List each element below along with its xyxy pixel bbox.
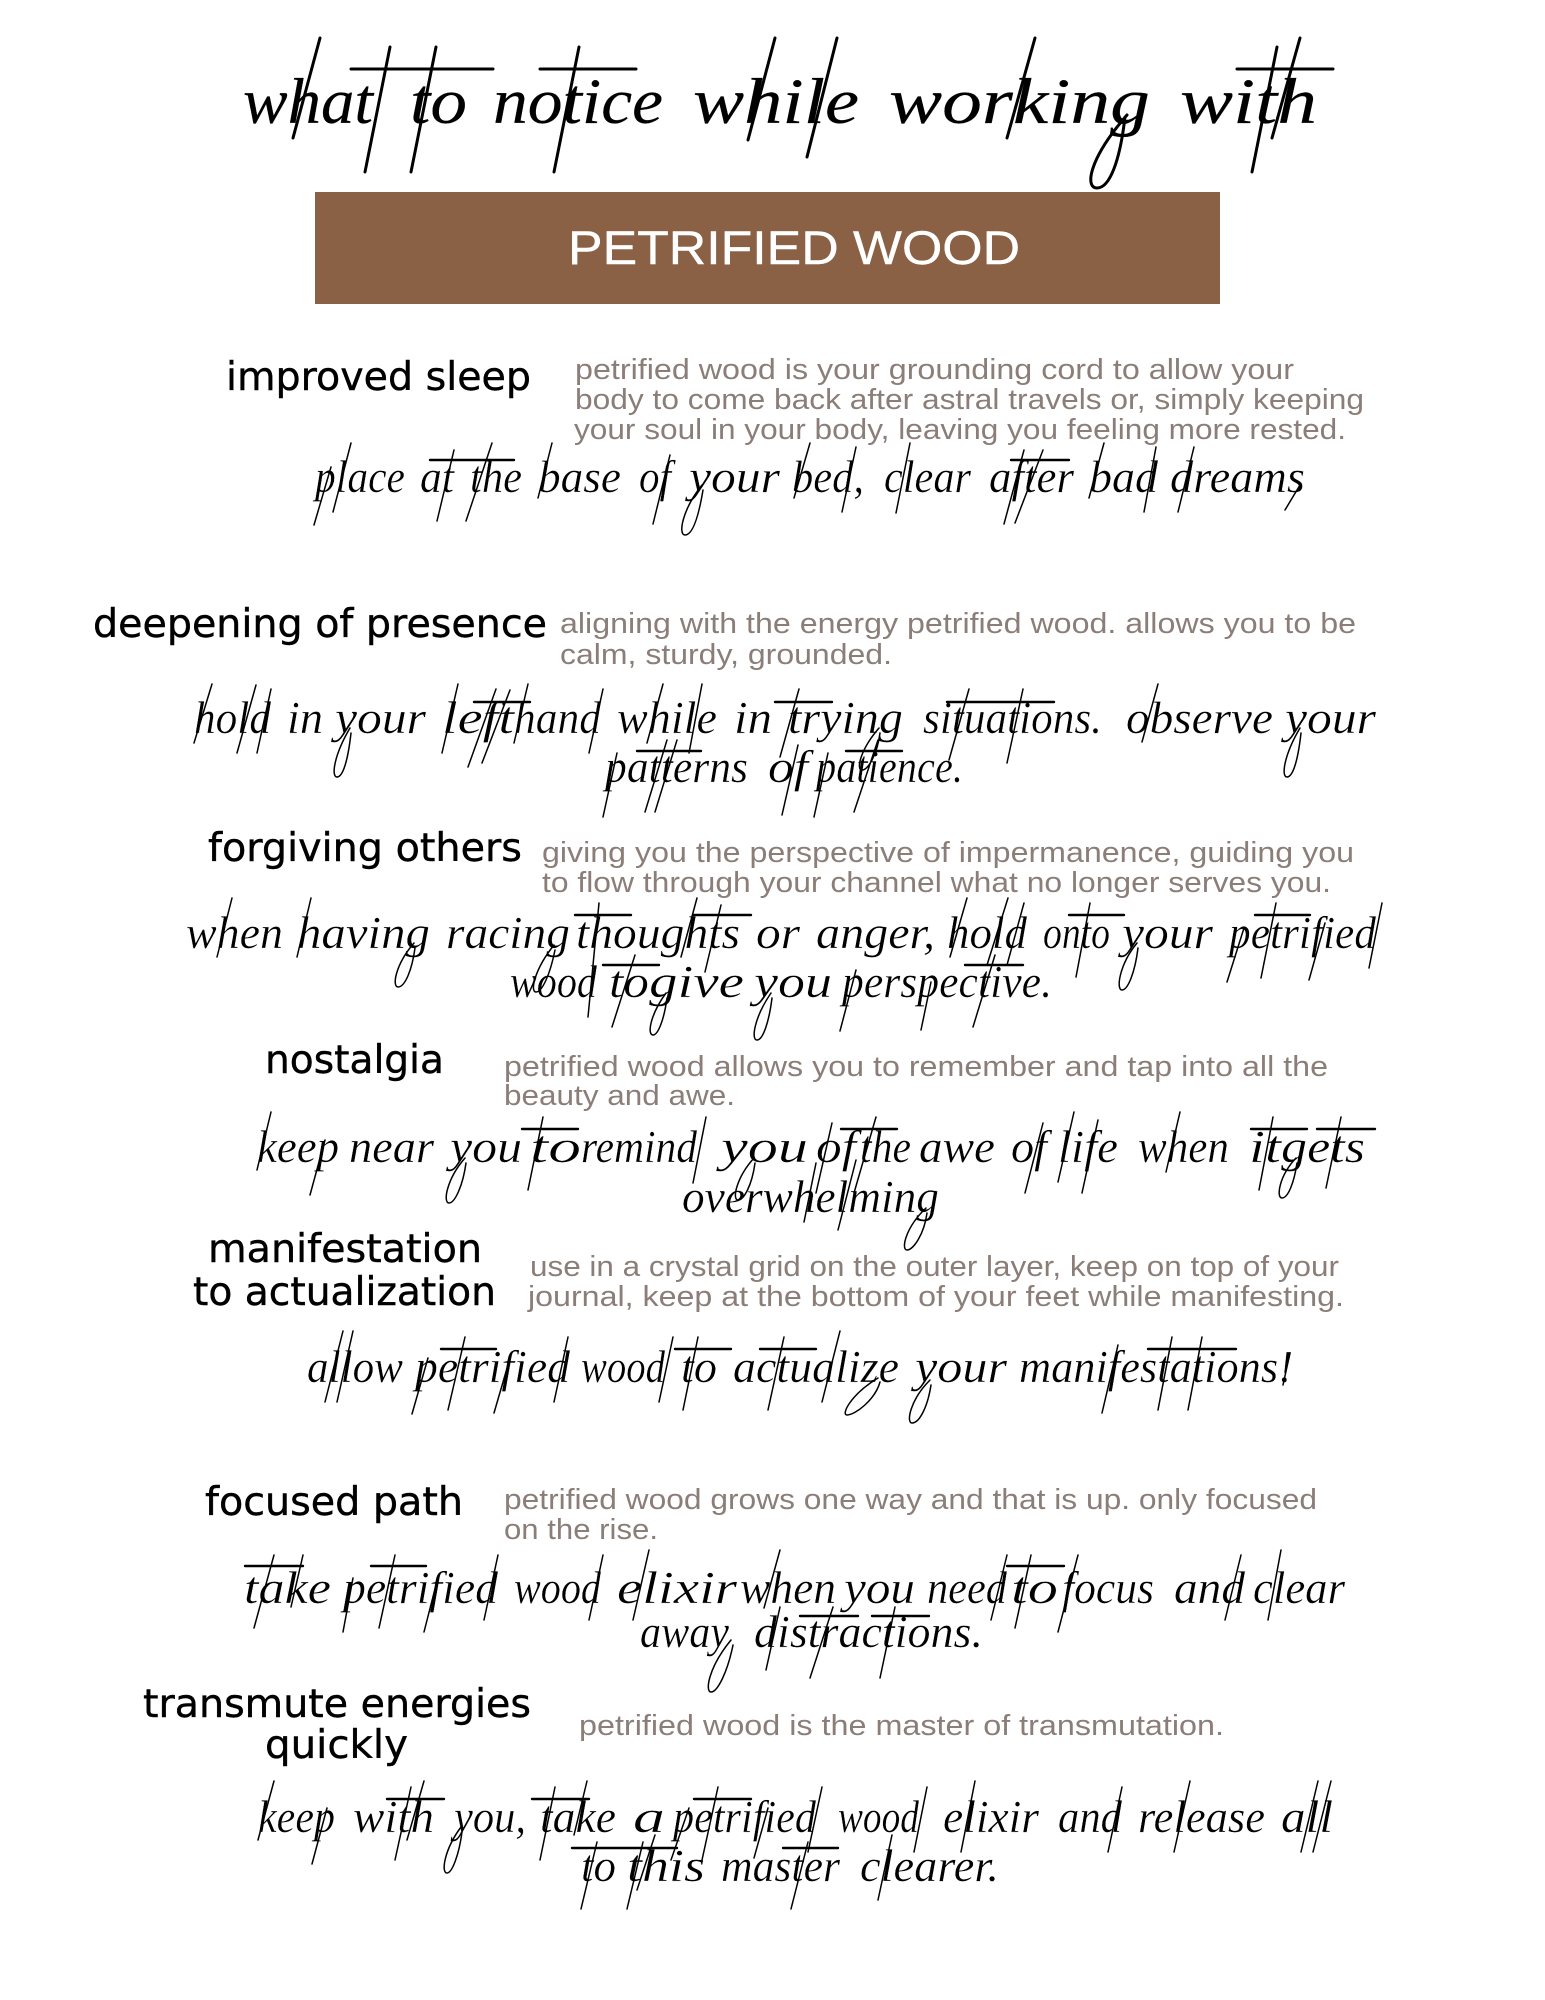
banner: petrified wood: PETRIFIED WOOD bbox=[568, 221, 1020, 274]
script note: deepening of presence: in bbox=[734, 692, 772, 743]
title: notice bbox=[493, 66, 663, 138]
script note: nostalgia: it bbox=[1249, 1121, 1283, 1172]
script note: manifestation to actualization: petrified bbox=[412, 1341, 571, 1392]
heading: transmute energies quickly: quickly bbox=[265, 1723, 408, 1768]
script note: transmute energies quickly: and bbox=[1058, 1791, 1123, 1842]
script note: improved sleep: clear bbox=[884, 451, 972, 502]
script note: nostalgia: the bbox=[860, 1121, 911, 1172]
heading: focused path: focused path bbox=[205, 1480, 463, 1525]
panel: transmute energies quickly bbox=[143, 1682, 1333, 1909]
script note: improved sleep: dreams bbox=[1170, 451, 1305, 502]
script note: deepening of presence: trying bbox=[788, 692, 903, 743]
title: to bbox=[410, 66, 467, 138]
script note: transmute energies quickly: to bbox=[581, 1840, 616, 1891]
script note: deepening of presence: your bbox=[1281, 692, 1377, 743]
script note: manifestation to actualization: allow bbox=[307, 1341, 403, 1392]
script note: forgiving others: hold bbox=[947, 907, 1028, 958]
script note: deepening of presence: patience. bbox=[813, 741, 963, 792]
script note: transmute energies quickly: all bbox=[1281, 1791, 1333, 1842]
description: forgiving others: to flow through your channel what no longer serves you. bbox=[542, 867, 1331, 899]
script note: forgiving others: you bbox=[749, 956, 832, 1007]
script note: deepening of presence: while bbox=[617, 692, 717, 743]
description: manifestation to actualization bbox=[527, 1251, 1344, 1313]
description: nostalgia: petrified wood allows you to remember and tap into all the bbox=[504, 1051, 1328, 1083]
script note: nostalgia bbox=[257, 1112, 1375, 1250]
description: focused path: petrified wood grows one way and that is up. only focused bbox=[504, 1484, 1317, 1516]
script note: transmute energies quickly: wood bbox=[838, 1791, 920, 1842]
description: focused path bbox=[504, 1484, 1317, 1546]
script note: focused path: clear bbox=[1253, 1562, 1346, 1613]
script note: nostalgia: keep bbox=[257, 1121, 339, 1172]
script note: transmute energies quickly: master bbox=[721, 1840, 841, 1891]
script note: nostalgia: of bbox=[816, 1121, 863, 1172]
script note: nostalgia: life bbox=[1058, 1121, 1118, 1172]
description: improved sleep bbox=[574, 354, 1364, 446]
script note: improved sleep: place bbox=[312, 451, 405, 502]
script note: forgiving others: or bbox=[756, 907, 801, 958]
description: focused path: on the rise. bbox=[504, 1514, 658, 1546]
title: what bbox=[243, 66, 375, 138]
script note: improved sleep: of bbox=[639, 451, 677, 502]
description: deepening of presence: calm, sturdy, grounded. bbox=[560, 639, 892, 671]
script note: deepening of presence: your bbox=[331, 692, 427, 743]
title: working bbox=[889, 66, 1150, 138]
script note: nostalgia: near bbox=[349, 1121, 435, 1172]
script note: nostalgia: of bbox=[1011, 1121, 1053, 1172]
script note: transmute energies quickly: this bbox=[627, 1840, 705, 1891]
script note: transmute energies quickly: petrified bbox=[670, 1791, 817, 1842]
description: manifestation to actualization: use in a crystal grid on the outer layer, keep on top of your bbox=[530, 1251, 1339, 1283]
panel: nostalgia bbox=[257, 1038, 1375, 1250]
script note: nostalgia: gets bbox=[1281, 1121, 1365, 1172]
script note: focused path: need bbox=[927, 1562, 1008, 1613]
description: forgiving others bbox=[542, 837, 1354, 899]
panel: deepening of presence bbox=[93, 602, 1377, 817]
script note: manifestation to actualization: to bbox=[681, 1341, 717, 1392]
script note: improved sleep: after bbox=[989, 451, 1075, 502]
heading: manifestation to actualization: to actualization bbox=[193, 1270, 496, 1315]
script note: transmute energies quickly: a bbox=[633, 1791, 665, 1842]
description: improved sleep: your soul in your body, leaving you feeling more rested. bbox=[574, 414, 1346, 446]
script note: nostalgia: to bbox=[530, 1121, 581, 1172]
script note: forgiving others: petrified bbox=[1226, 907, 1377, 958]
heading: forgiving others: forgiving others bbox=[208, 826, 522, 871]
script note: forgiving others: thoughts bbox=[576, 907, 740, 958]
description: deepening of presence bbox=[560, 608, 1356, 671]
description: nostalgia: beauty and awe. bbox=[504, 1080, 735, 1112]
script note: forgiving others: having bbox=[297, 907, 430, 958]
script note: nostalgia: when bbox=[1138, 1121, 1229, 1172]
script note: nostalgia: overwhelming bbox=[682, 1171, 939, 1222]
script note: focused path: wood bbox=[514, 1562, 602, 1613]
script note: manifestation to actualization: your bbox=[911, 1341, 1008, 1392]
script note: improved sleep bbox=[312, 443, 1305, 535]
script note: nostalgia: you bbox=[716, 1121, 808, 1172]
script note: focused path: when bbox=[740, 1562, 836, 1613]
script note: improved sleep: bed, bbox=[792, 451, 864, 502]
script note: improved sleep: your bbox=[685, 451, 781, 502]
script note: improved sleep: the bbox=[470, 451, 522, 502]
title: with bbox=[1180, 66, 1317, 138]
script note: forgiving others: when bbox=[186, 907, 283, 958]
script note: manifestation to actualization: wood bbox=[581, 1341, 666, 1392]
script note: manifestation to actualization: manifestations! bbox=[1019, 1341, 1293, 1392]
heading: transmute energies quickly: transmute energies bbox=[143, 1682, 531, 1727]
description: nostalgia bbox=[504, 1051, 1328, 1112]
script note: deepening of presence: in bbox=[287, 692, 323, 743]
script note: forgiving others: wood bbox=[510, 956, 598, 1007]
script note: deepening of presence: hold bbox=[194, 692, 272, 743]
script note: forgiving others: racing bbox=[446, 907, 570, 958]
description: manifestation to actualization: journal, keep at the bottom of your feet while manifesting. bbox=[527, 1281, 1344, 1313]
title: while bbox=[693, 66, 859, 138]
script note: deepening of presence: left bbox=[442, 692, 515, 743]
script note: improved sleep: at bbox=[420, 451, 455, 502]
script note: focused path: distractions. bbox=[754, 1606, 983, 1657]
panel: manifestation to actualization bbox=[193, 1227, 1344, 1423]
script note: manifestation to actualization: actualize bbox=[733, 1341, 899, 1392]
script note: improved sleep: bad bbox=[1089, 451, 1159, 502]
script note: transmute energies quickly: take bbox=[540, 1791, 616, 1842]
script note: forgiving others: perspective. bbox=[839, 956, 1052, 1007]
script note: transmute energies quickly: you, bbox=[450, 1791, 526, 1842]
script note: focused path: petrified bbox=[340, 1562, 499, 1613]
heading: manifestation to actualization bbox=[193, 1227, 496, 1315]
script note: focused path bbox=[244, 1550, 1346, 1692]
script note: transmute energies quickly: release bbox=[1138, 1791, 1265, 1842]
script note: nostalgia: awe bbox=[919, 1121, 995, 1172]
script note: manifestation to actualization bbox=[307, 1331, 1293, 1423]
script note: nostalgia: remind bbox=[581, 1121, 698, 1172]
script note: transmute energies quickly: elixir bbox=[943, 1791, 1040, 1842]
script note: transmute energies quickly bbox=[258, 1781, 1333, 1909]
title bbox=[243, 38, 1333, 188]
script note: deepening of presence: hand bbox=[514, 692, 602, 743]
script note: nostalgia: you bbox=[446, 1121, 522, 1172]
script note: transmute energies quickly: with bbox=[353, 1791, 434, 1842]
script note: deepening of presence bbox=[194, 684, 1377, 817]
panel: focused path bbox=[205, 1480, 1346, 1692]
script note: transmute energies quickly: keep bbox=[258, 1791, 335, 1842]
script note: forgiving others: your bbox=[1118, 907, 1214, 958]
heading: deepening of presence: deepening of presence bbox=[93, 602, 547, 647]
panel: improved sleep bbox=[226, 354, 1364, 535]
banner: petrified wood bbox=[315, 192, 1220, 304]
script note: forgiving others bbox=[186, 898, 1382, 1040]
script note: deepening of presence: of bbox=[768, 741, 815, 792]
description: forgiving others: giving you the perspective of impermanence, guiding you bbox=[542, 837, 1354, 869]
script note: improved sleep: base bbox=[538, 451, 621, 502]
script note: deepening of presence: situations. bbox=[923, 692, 1102, 743]
script note: forgiving others: anger, bbox=[816, 907, 935, 958]
script note: forgiving others: onto bbox=[1043, 907, 1110, 958]
script note: transmute energies quickly: clearer. bbox=[860, 1840, 999, 1891]
script note: focused path: focus bbox=[1062, 1562, 1154, 1613]
description: deepening of presence: aligning with the energy petrified wood. allows you to be bbox=[560, 608, 1356, 640]
script note: forgiving others: to bbox=[609, 956, 649, 1007]
script note: deepening of presence: patterns bbox=[602, 741, 748, 792]
panel: forgiving others bbox=[186, 826, 1382, 1040]
script note: focused path: elixir bbox=[617, 1562, 738, 1613]
script note: focused path: you bbox=[840, 1562, 915, 1613]
description: improved sleep: body to come back after astral travels or, simply keeping bbox=[575, 384, 1364, 416]
script note: forgiving others: give bbox=[649, 956, 744, 1007]
heading: manifestation to actualization: manifestation bbox=[208, 1227, 482, 1272]
description: transmute energies quickly: petrified wood is the master of transmutation. bbox=[579, 1710, 1224, 1742]
script note: focused path: and bbox=[1174, 1562, 1246, 1613]
heading: transmute energies quickly bbox=[143, 1682, 531, 1768]
script note: focused path: to bbox=[1011, 1562, 1058, 1613]
heading: improved sleep: improved sleep bbox=[226, 355, 531, 400]
script note: deepening of presence: observe bbox=[1126, 692, 1273, 743]
description: improved sleep: petrified wood is your grounding cord to allow your bbox=[575, 354, 1294, 386]
script note: focused path: take bbox=[244, 1562, 331, 1613]
heading: nostalgia: nostalgia bbox=[265, 1038, 444, 1083]
script note: focused path: away bbox=[640, 1606, 730, 1657]
